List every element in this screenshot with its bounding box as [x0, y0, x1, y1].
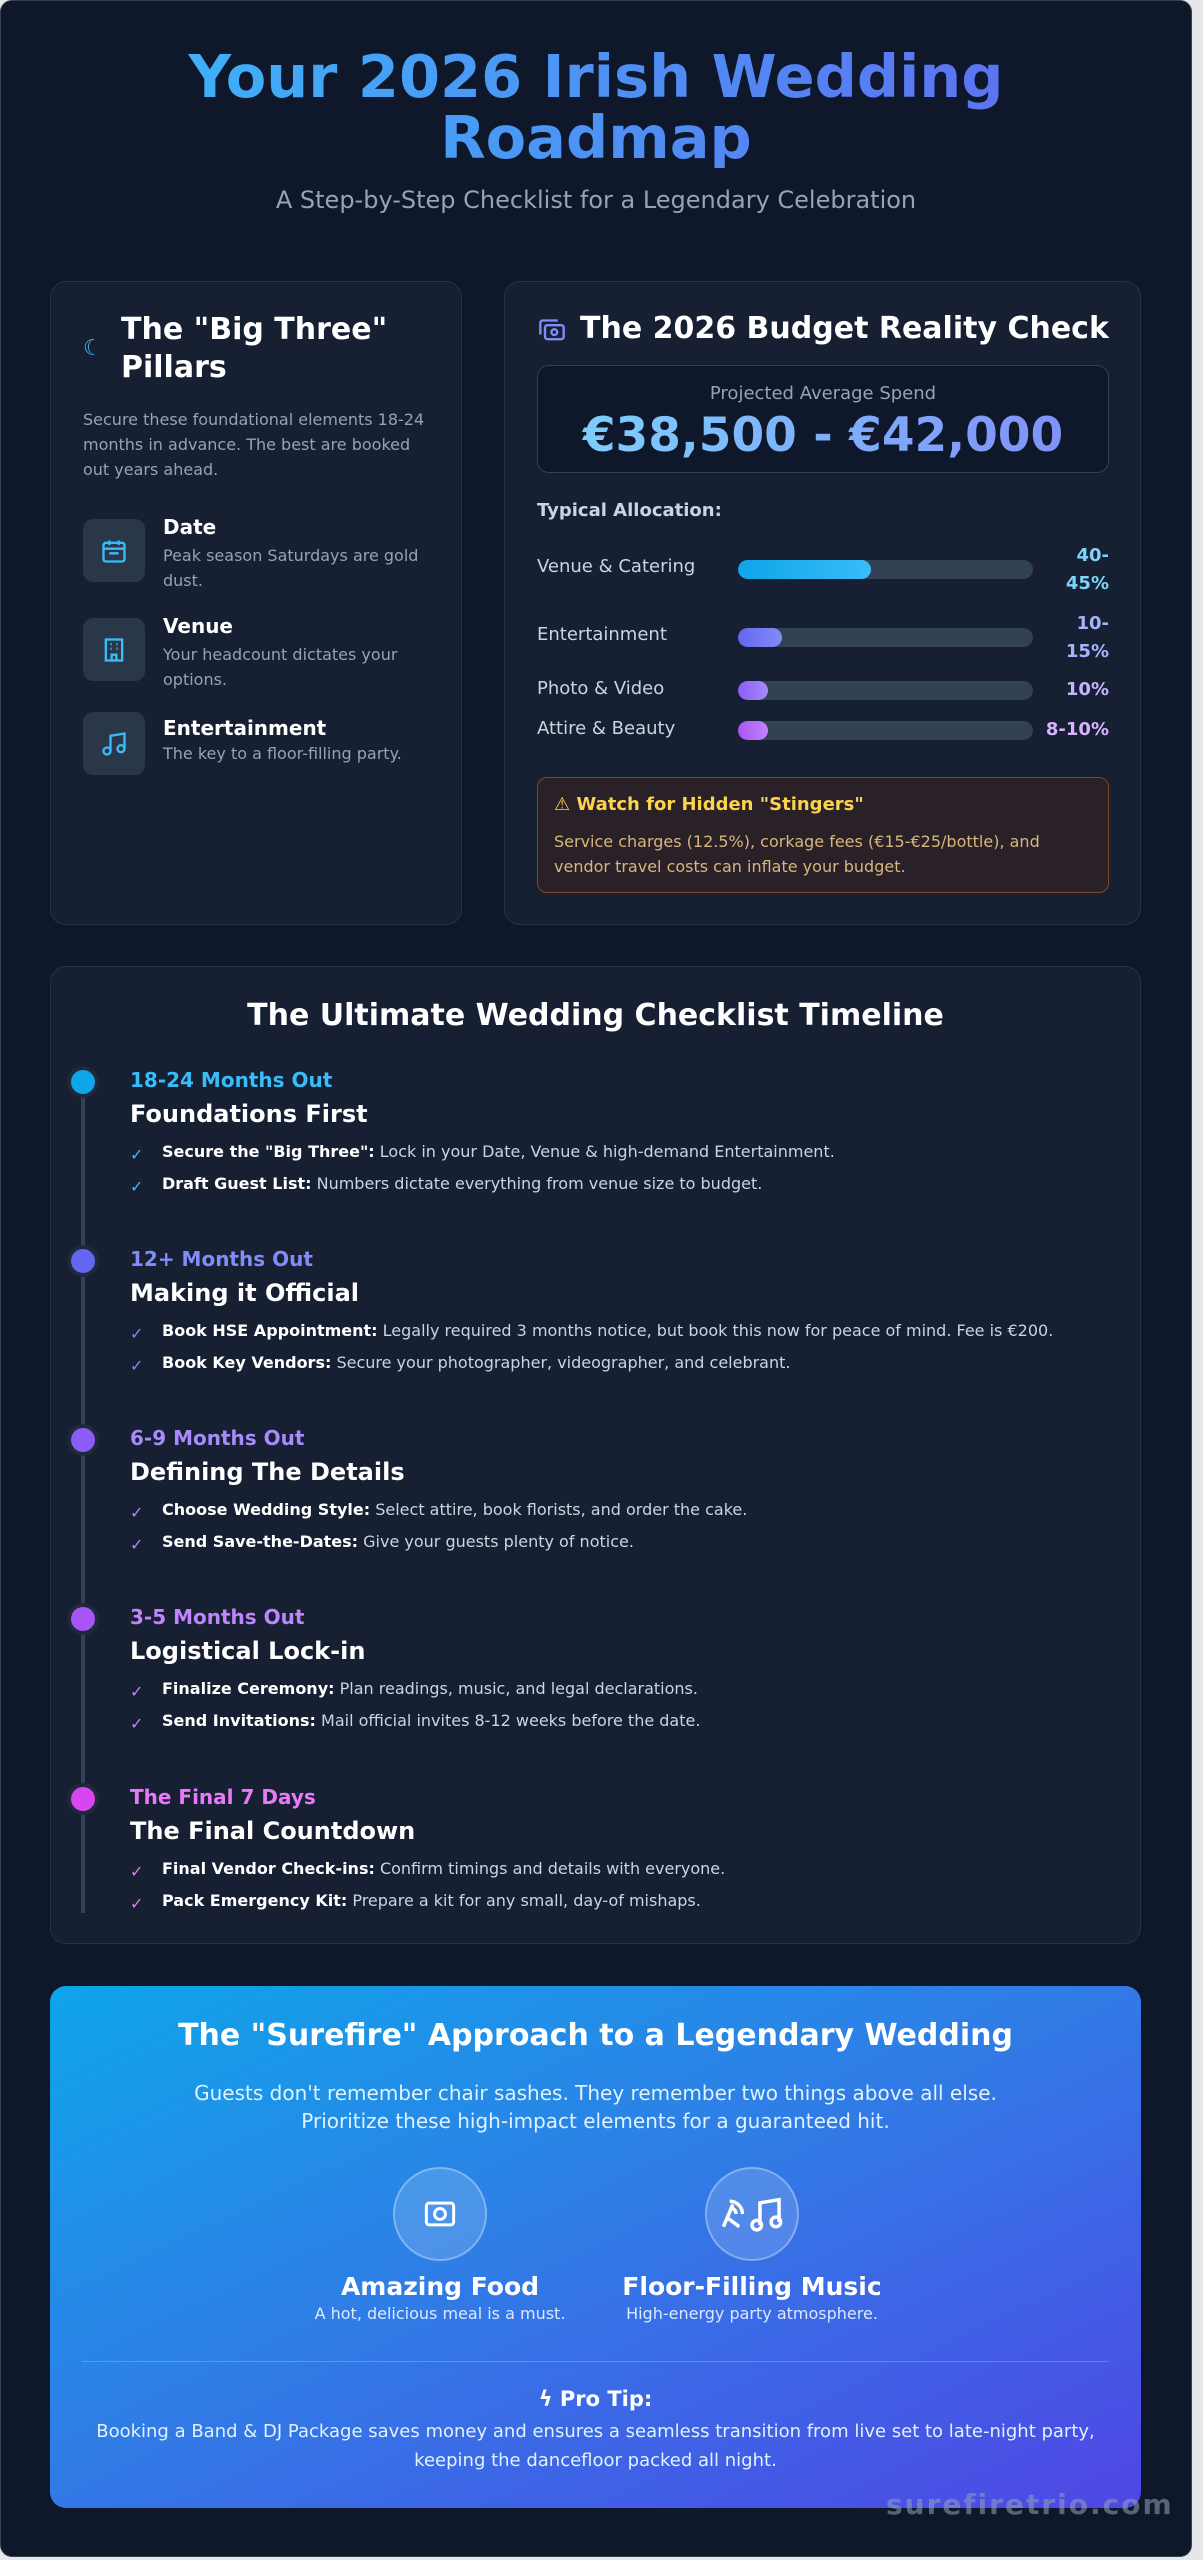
step: 3-5 months: ✓ — [130, 1682, 143, 1701]
step: 3-5 months: Finalize Ceremony: Plan readings, music, and legal declarations. — [162, 1679, 698, 1698]
item: venue — [83, 614, 398, 689]
step: 18-24 months: Secure the "Big Three": Lock in your Date, Venue & high-demand Entertainment. — [162, 1142, 835, 1161]
text: 45% — [1066, 573, 1109, 594]
icon: building — [83, 618, 145, 681]
step: 3-5 months: Logistical Lock-in — [130, 1637, 365, 1665]
item: venue: Venue — [163, 614, 233, 638]
heading: big three — [121, 312, 387, 385]
step: 12+ months: Book HSE Appointment: Legally required 3 months notice, but book this now for peace of mind. Fee is €200. — [162, 1321, 1053, 1340]
icon: pillars: ☾ — [83, 336, 103, 361]
icon: calendar — [83, 519, 145, 582]
callout: hidden stingers: ⚠ Watch for Hidden "Stingers" — [554, 794, 864, 815]
icon: money — [539, 319, 565, 340]
text: Entertainment — [537, 624, 667, 645]
step: 18-24 months — [68, 1066, 835, 1196]
step: final 7 days — [68, 1783, 725, 1913]
text: 10% — [1066, 679, 1109, 700]
text: 8-10% — [1046, 719, 1109, 740]
text: pro tip: Booking a Band & DJ Package saves money and ensures a seamless transition from live set to late-night party, — [96, 2421, 1095, 2442]
text: pro tip — [96, 2387, 1095, 2471]
text: Venue & Catering — [537, 556, 695, 577]
text: pro tip: ϟ Pro Tip: — [539, 2387, 652, 2411]
text: floor-filling music: Floor-Filling Music — [622, 2272, 882, 2301]
text: pro tip: keeping the dancefloor packed all night. — [414, 2450, 777, 2471]
title: Roadmap — [440, 103, 752, 172]
item: venue: Your headcount dictates your options. — [163, 645, 397, 689]
text: floor-filling music — [622, 2272, 882, 2323]
text: intro: Secure these foundational elements 18-24 months in advance. The best are booked out years ahead. — [83, 410, 424, 479]
text: Attire & Beauty — [537, 718, 675, 739]
step: 6-9 months — [68, 1424, 747, 1554]
item: date: Date — [163, 515, 216, 539]
icon: music — [705, 2167, 799, 2261]
step: final 7 days: Final Vendor Check-ins: Confirm timings and details with everyone. — [162, 1859, 725, 1878]
text: intro — [194, 2081, 997, 2133]
text: 40- — [1076, 545, 1109, 566]
step: 18-24 months: Foundations First — [130, 1100, 368, 1128]
callout: hidden stingers: Service charges (12.5%), corkage fees (€15-€25/bottle), and vendor travel costs can inflate your budget. — [554, 832, 1040, 876]
step: 12+ months — [68, 1245, 1053, 1375]
step: final 7 days: ✓ — [130, 1862, 143, 1881]
callout: projected spend: Projected Average Spend — [710, 383, 936, 404]
step: 6-9 months: ✓ — [130, 1535, 143, 1554]
step: 12+ months: ✓ — [130, 1356, 143, 1375]
panel: big three pillars — [50, 281, 462, 925]
step: 12+ months: 12+ Months Out — [130, 1247, 313, 1271]
step: 3-5 months: ✓ — [130, 1714, 143, 1733]
step: 3-5 months — [68, 1603, 700, 1733]
step: 6-9 months: 6-9 Months Out — [130, 1426, 304, 1450]
heading: budget: The 2026 Budget Reality Check — [580, 311, 1109, 346]
callout: projected spend: €38,500 - €42,000 — [583, 408, 1063, 463]
step: 3-5 months: 3-5 Months Out — [130, 1605, 304, 1629]
item: entertainment: Entertainment — [163, 716, 326, 740]
panel: surefire approach — [50, 1986, 1141, 2508]
subtitle: A Step-by-Step Checklist for a Legendary Celebration — [276, 186, 916, 214]
text: typical allocation: Typical Allocation: — [537, 500, 722, 521]
title — [0, 46, 1192, 168]
panel: timeline — [50, 966, 1141, 1944]
item: entertainment — [83, 712, 402, 775]
step: 18-24 months: 18-24 Months Out — [130, 1068, 332, 1092]
heading: big three: Pillars — [121, 350, 227, 385]
step: 12+ months: ✓ — [130, 1324, 143, 1343]
text: 10- — [1076, 613, 1109, 634]
text: intro: Guests don't remember chair sashes. They remember two things above all else. — [194, 2081, 997, 2105]
bar chart: allocation — [537, 540, 1109, 750]
callout: hidden stingers — [537, 777, 1109, 893]
item: date — [83, 515, 418, 590]
step: final 7 days: The Final Countdown — [130, 1817, 415, 1845]
text: intro: Prioritize these high-impact elements for a guaranteed hit. — [301, 2109, 890, 2133]
item: date: Peak season Saturdays are gold dust. — [163, 546, 418, 590]
text: amazing food: Amazing Food — [341, 2272, 539, 2301]
heading: surefire: The "Surefire" Approach to a Legendary Wedding — [178, 2018, 1013, 2053]
heading: big three: The "Big Three" — [121, 312, 387, 347]
callout: projected spend — [537, 365, 1109, 473]
item: entertainment: The key to a floor-filling party. — [163, 744, 402, 763]
icon: music — [83, 712, 145, 775]
step: 18-24 months: ✓ — [130, 1145, 143, 1164]
text: 15% — [1066, 641, 1109, 662]
step: final 7 days: ✓ — [130, 1894, 143, 1913]
watermark: surefiretrio.com — [886, 2488, 1174, 2521]
heading: timeline: The Ultimate Wedding Checklist Timeline — [247, 998, 944, 1033]
text: floor-filling music: High-energy party atmosphere. — [626, 2304, 878, 2323]
panel: budget — [504, 281, 1141, 925]
step: 18-24 months: ✓ — [130, 1177, 143, 1196]
step: 12+ months: Book Key Vendors: Secure your photographer, videographer, and celebrant. — [162, 1353, 790, 1372]
step: 18-24 months: Draft Guest List: Numbers dictate everything from venue size to budget. — [162, 1174, 762, 1193]
step: 6-9 months: ✓ — [130, 1503, 143, 1522]
step: 3-5 months: Send Invitations: Mail official invites 8-12 weeks before the date. — [162, 1711, 700, 1730]
step: 12+ months: Making it Official — [130, 1279, 359, 1307]
text: amazing food: A hot, delicious meal is a must. — [315, 2304, 565, 2323]
icon: food — [393, 2167, 487, 2261]
title: Your 2026 Irish Wedding — [188, 42, 1004, 111]
step: 6-9 months: Send Save-the-Dates: Give your guests plenty of notice. — [162, 1532, 634, 1551]
step: 6-9 months: Defining The Details — [130, 1458, 405, 1486]
text: amazing food — [314, 2272, 565, 2323]
step: 6-9 months: Choose Wedding Style: Select attire, book florists, and order the cake. — [162, 1500, 747, 1519]
text: Photo & Video — [537, 678, 664, 699]
step: final 7 days: The Final 7 Days — [130, 1785, 316, 1809]
step: final 7 days: Pack Emergency Kit: Prepare a kit for any small, day-of mishaps. — [162, 1891, 701, 1910]
